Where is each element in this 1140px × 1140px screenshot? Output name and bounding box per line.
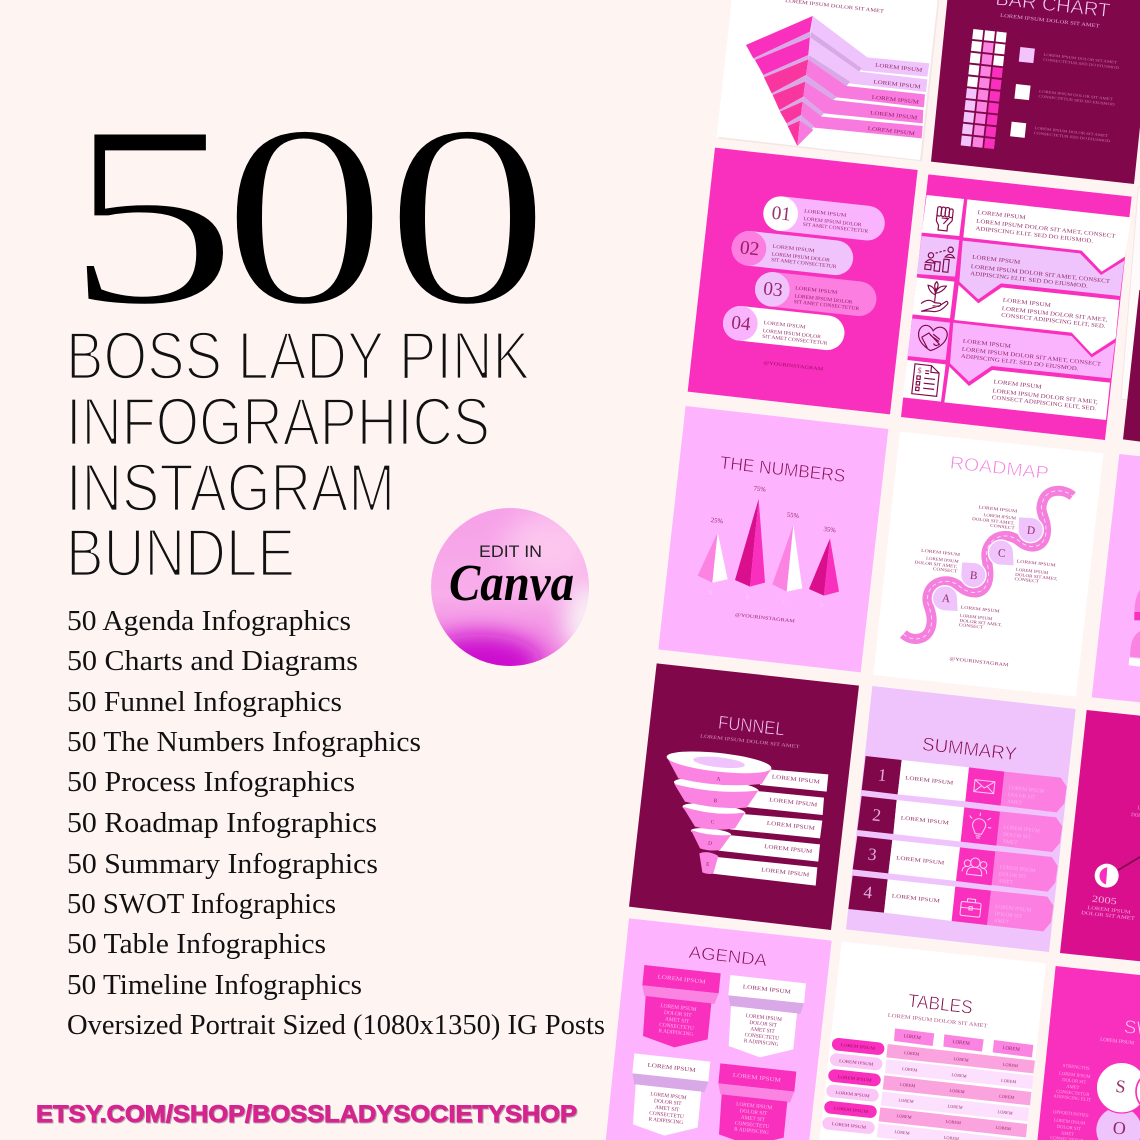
process text: LOREM IPSUM DOLOR SIT AMET,: [1001, 306, 1108, 324]
process rows: [944, 199, 1131, 420]
funnel letters and labels: LOREM IPSUM: [761, 867, 809, 879]
pill 01: LOREM IPSUM: [804, 209, 847, 219]
panel: process with icons: [901, 174, 1132, 440]
list of bundle contents: Oversized Portrait Sized (1080x1350) IG Posts: [67, 1009, 605, 1041]
summary row 1: AMET: [1007, 799, 1023, 807]
milestone markers: C: [997, 547, 1006, 560]
panel: the numbers: @YOURINSTAGRAM: [735, 613, 795, 624]
agenda card 1: CONSECTETU: [659, 1022, 694, 1032]
icon: plant in hand: [920, 280, 950, 314]
chart legend: LOREM IPSUM DOLOR SIT AMET: [1034, 126, 1109, 138]
pill 04: LOREM IPSUM DOLOR: [762, 329, 822, 340]
chart legend: LOREM IPSUM DOLOR SIT AMET: [1043, 53, 1118, 65]
panel: agenda cards: [603, 918, 832, 1140]
pyramid chart: D: [819, 603, 824, 609]
table rows: LOREM: [951, 1072, 967, 1079]
title number 500: 0: [222, 72, 387, 360]
list of bundle contents: 50 Process Infographics: [67, 766, 355, 798]
pill 03: LOREM IPSUM DOLOR: [794, 294, 853, 306]
table rows: LOREM: [1001, 1078, 1017, 1084]
summary row 3: 3: [867, 845, 878, 864]
chart legend: LOREM IPSUM DOLOR SIT AMET: [1039, 89, 1114, 101]
icon cells: [903, 195, 964, 402]
agenda card 1: [642, 965, 721, 1047]
panel: partial light pink post at right edge: [1092, 454, 1140, 703]
list of bundle contents: 50 Summary Infographics: [67, 848, 378, 880]
process text: ADIPISCING ELIT. SED DO EIUSMOD.: [960, 354, 1079, 373]
chart legend: CONSECTETUR SED DO EIUSMOD: [1043, 58, 1120, 70]
pyramid chart: B: [745, 595, 750, 601]
pyramid chart: C: [782, 599, 786, 605]
table column headers: LOREM: [903, 1034, 922, 1041]
table rows: LOREM: [904, 1050, 920, 1057]
table rows: LOREM: [902, 1066, 918, 1073]
icon: checklist document: $: [917, 366, 922, 376]
agenda card 1: DOLOR SIT: [664, 1010, 693, 1019]
roadmap labels: CONSECT: [933, 566, 958, 574]
agenda card 4: R ADIPISCING: [734, 1126, 769, 1136]
summary row 4: DOLOR SIT: [994, 911, 1023, 920]
shop url: ETSY.COM/SHOP/BOSSLADYSOCIETYSHOP: [36, 1101, 577, 1128]
pyramid chart: 55%: [786, 512, 800, 520]
process text: LOREM IPSUM: [972, 255, 1020, 266]
list of bundle contents: 50 SWOT Infographics: [67, 888, 336, 920]
shop url: ETSY.COM/SHOP/BOSSLADYSOCIETYSHOP: [37, 1102, 578, 1129]
agenda card 3: [632, 1053, 710, 1136]
table rows: LOREM: [946, 1119, 961, 1125]
agenda card 3: DOLOR SIT: [654, 1098, 683, 1107]
panel: dark post at right edge: [1123, 290, 1140, 442]
panel: bar chart: LOREM IPSUM DOLOR SIT AMET: [1000, 14, 1100, 29]
list of bundle contents: 50 Agenda Infographics: [67, 605, 351, 637]
badge: Edit in Canva: Canva: [449, 555, 574, 612]
table rows: LOREM: [1003, 1062, 1018, 1068]
list of bundle contents: 50 Funnel Infographics: [67, 686, 342, 718]
table column headers: [894, 1028, 1033, 1057]
roadmap labels: CONSECT: [1014, 576, 1040, 584]
swot circles: [1096, 1062, 1140, 1140]
agenda card 2: DOLOR SIT: [749, 1020, 778, 1029]
swot labels: OPPORTUNITIES: [1053, 1110, 1089, 1119]
process text: CONSECT ADIPISCING ELIT, SED.: [991, 395, 1097, 412]
agenda card 1: LOREM IPSUM: [657, 974, 706, 986]
swot labels: LOREM IPSUM: [1059, 1072, 1091, 1080]
summary row 2: LOREM IPSUM: [900, 815, 949, 827]
list of bundle contents: 50 Table Infographics: [67, 928, 326, 960]
process text: LOREM IPSUM DOLOR SIT AMET,: [992, 388, 1099, 406]
summary row 1: LOREM IPSUM: [1008, 785, 1045, 795]
funnel letters and labels: LOREM IPSUM: [766, 821, 815, 832]
pyramid right faces and label bars: [797, 16, 929, 146]
table row labels: LOREM IPSUM: [834, 1105, 868, 1114]
table rows: LOREM: [896, 1113, 912, 1120]
table row labels: LOREM IPSUM: [835, 1090, 870, 1098]
chart legend: [1010, 47, 1120, 143]
panel: bar chart: [931, 0, 1140, 184]
list of bundle contents: 50 The Numbers Infographics: [67, 726, 421, 758]
panel: tables: [817, 942, 1046, 1140]
pill 03: [753, 270, 878, 318]
winding road: [903, 491, 1073, 639]
chart legend: CONSECTETUR SED DO EIUSMOD: [1034, 131, 1111, 143]
agenda card 1: AMET SIT: [665, 1016, 690, 1025]
pyramid chart: 75%: [753, 485, 766, 494]
funnel cone layers: [666, 747, 772, 874]
panel: tables: LOREM IPSUM DOLOR SIT AMET: [887, 1013, 988, 1030]
roadmap labels: DOLOR SIT AMET,: [914, 559, 958, 570]
heading: Boss Lady Pink Infographics Instagram Bundle: BUNDLE: [66, 515, 295, 591]
table rows: LOREM: [996, 1125, 1011, 1131]
table column headers: LOREM: [1002, 1046, 1021, 1053]
summary row 3: LOREM IPSUM: [896, 855, 945, 867]
panel: funnel pyramid: [717, 0, 939, 161]
table rows: LOREM: [953, 1056, 969, 1063]
panel: agenda pills 01-04: [688, 148, 918, 414]
agenda card 3: CONSECTETU: [649, 1110, 684, 1120]
list of bundle contents: 50 Roadmap Infographics: [67, 807, 377, 839]
summary row 4: [848, 876, 1053, 931]
roadmap labels: LOREM IPSUM: [960, 613, 993, 621]
roadmap labels: CONSECT: [990, 523, 1015, 530]
process text: LOREM IPSUM DOLOR SIT AMET, CONSECT: [961, 347, 1102, 368]
roadmap labels: CONSECT: [959, 622, 984, 630]
panel: tables: TABLES: [907, 990, 974, 1018]
table rows: LOREM: [949, 1088, 965, 1094]
table row labels: LOREM IPSUM: [832, 1121, 866, 1130]
summary row 2: AMET: [1002, 839, 1019, 846]
list of bundle contents: 50 Timeline Infographics: [67, 969, 362, 1001]
agenda card 4: CONSECTETU: [735, 1120, 770, 1130]
agenda card 1: R ADIPISCING: [658, 1028, 694, 1038]
pill 02: SIT AMET CONSECTETUR: [771, 258, 837, 270]
swot labels: STRENGTHS: [1062, 1064, 1090, 1072]
panel: funnel: LOREM IPSUM DOLOR SIT AMET: [700, 734, 800, 750]
funnel letters and labels: LOREM IPSUM: [764, 844, 812, 855]
panel: timeline: LOREM IPSUM: [1087, 906, 1131, 916]
agenda card 2: [728, 975, 806, 1057]
pill 02: [730, 229, 855, 277]
pill 02: LOREM IPSUM DOLOR: [771, 252, 831, 264]
pill 02: 02: [739, 237, 760, 260]
table row labels: LOREM IPSUM: [839, 1058, 874, 1067]
table row labels: LOREM IPSUM: [837, 1074, 872, 1083]
process text: LOREM IPSUM DOLOR SIT AMET, CONSECT: [970, 264, 1111, 285]
table rows: LOREM: [947, 1103, 963, 1110]
agenda card 3: AMET SIT: [655, 1105, 680, 1113]
title number 500: [64, 72, 550, 360]
swot labels: ADIPISCING ELIT: [1053, 1094, 1091, 1103]
agenda card 4: LOREM IPSUM: [732, 1073, 781, 1084]
pill 04: SIT AMET CONSECTETUR: [762, 335, 828, 347]
swot labels: AMET: [1061, 1131, 1074, 1138]
timeline connector: [1118, 855, 1140, 870]
panel: summary: [846, 686, 1076, 952]
table row labels: LOREM IPSUM: [841, 1042, 875, 1051]
heading: Boss Lady Pink Infographics Instagram Bundle: INFOGRAPHICS: [66, 384, 490, 460]
pill 04: 04: [730, 312, 752, 335]
pyramid left faces: [746, 16, 813, 146]
funnel letters and labels: A: [716, 776, 721, 783]
panel: funnel: FUNNEL: [717, 711, 786, 740]
process text: LOREM IPSUM: [977, 210, 1026, 221]
summary row 1: DOLOR SIT: [1007, 792, 1036, 801]
swot circles: O: [1112, 1117, 1127, 1139]
panel: roadmap: ROADMAP: [949, 452, 1050, 483]
funnel letters and labels: [706, 774, 820, 879]
pyramid chart: A: [708, 590, 714, 597]
panel: the numbers: [658, 406, 888, 672]
process text: LOREM IPSUM: [993, 379, 1042, 391]
table row labels: [822, 1037, 885, 1135]
process text: [960, 210, 1116, 412]
milestone markers: [932, 517, 1043, 612]
funnel letters and labels: B: [713, 798, 718, 804]
pill 03: 03: [762, 278, 784, 301]
icon: heart and hand: [917, 325, 948, 352]
agenda card 3: LOREM IPSUM: [647, 1063, 696, 1074]
badge: Edit in Canva: EDIT IN: [479, 542, 542, 561]
agenda card 2: AMET SIT: [750, 1026, 776, 1035]
panel: swot: LOREM IPSUM: [1100, 1038, 1135, 1046]
process text: LOREM IPSUM: [962, 339, 1011, 350]
list of bundle contents: 50 Charts and Diagrams: [67, 645, 358, 677]
icon: checklist document: [912, 364, 940, 396]
panel: roadmap: @YOURINSTAGRAM: [949, 657, 1009, 668]
roadmap labels: [914, 504, 1058, 630]
agenda card 2: CONSECTETU: [744, 1032, 779, 1042]
panel: summary: SUMMARY: [921, 733, 1018, 764]
panel: the numbers: THE NUMBERS: [719, 452, 846, 486]
swot circles: S: [1115, 1076, 1127, 1097]
panel: roadmap: [873, 432, 1103, 697]
pyramid chart: 25%: [710, 517, 724, 525]
swot labels: CONSECTETUR: [1056, 1090, 1090, 1098]
table rows: LOREM: [900, 1082, 916, 1088]
pyramid right faces and label bars: LOREM IPSUM: [867, 126, 915, 137]
table rows: LOREM: [997, 1109, 1013, 1116]
panel: timeline: [1060, 710, 1140, 962]
roadmap labels: DOLOR SIT AMET,: [959, 618, 1002, 628]
process text: LOREM IPSUM: [1002, 298, 1051, 309]
table rows: LOREM: [898, 1097, 914, 1104]
roadmap labels: LOREM IPSUM: [978, 504, 1018, 514]
icon: growth chart: [925, 245, 956, 273]
pyramid right faces and label bars: LOREM IPSUM: [875, 63, 923, 74]
panel: agenda cards: AGENDA: [688, 942, 768, 970]
milestone markers: B: [969, 570, 978, 582]
pyramid chart: [698, 485, 839, 609]
roadmap labels: LOREM IPSUM: [1016, 567, 1049, 575]
summary row 1: LOREM IPSUM: [905, 775, 954, 787]
table rows: LOREM: [894, 1129, 910, 1136]
agenda card 2: LOREM IPSUM: [745, 1013, 782, 1023]
agenda card 4: AMET SIT: [740, 1115, 766, 1123]
list of bundle contents: [67, 605, 605, 1041]
summary row 2: [857, 796, 1062, 852]
summary row 4: LOREM IPSUM: [995, 904, 1032, 914]
agenda card 1: LOREM IPSUM: [660, 1003, 697, 1013]
swot labels: LOREM IPSUM: [1053, 1118, 1085, 1127]
milestone markers: D: [1026, 525, 1036, 537]
milestone markers: A: [941, 593, 952, 606]
summary row 4: AMET: [993, 918, 1010, 926]
process text: ADIPISCING ELIT. SED DO EIUSMOD.: [975, 226, 1094, 245]
roadmap labels: LOREM IPSUM: [926, 555, 959, 564]
pyramid right faces and label bars: LOREM IPSUM: [873, 79, 921, 90]
swot labels: [1050, 1064, 1091, 1140]
agenda card 2: R ADIPISCING: [743, 1038, 779, 1048]
process text: CONSECT ADIPISCING ELIT, SED.: [1001, 313, 1107, 330]
timeline marker: [1095, 864, 1119, 888]
chart legend: CONSECTETUR SED DO EIUSMOD: [1038, 94, 1115, 107]
heading: Boss Lady Pink Infographics Instagram Bundle: BOSS LADY PINK: [66, 318, 530, 394]
table rows: LOREM: [999, 1093, 1015, 1100]
agenda card 3: LOREM IPSUM: [650, 1091, 687, 1101]
roadmap labels: LOREM IPSUM: [1017, 558, 1056, 568]
pyramid right faces and label bars: LOREM IPSUM: [871, 95, 919, 106]
roadmap labels: DOLOR SIT AMET,: [972, 516, 1015, 527]
roadmap labels: LOREM IPSUM: [983, 512, 1016, 521]
funnel letters and labels: E: [706, 862, 710, 868]
summary row 2: LOREM IPSUM: [1003, 825, 1040, 835]
pill 03: LOREM IPSUM: [795, 286, 838, 296]
agenda card 2: LOREM IPSUM: [742, 984, 791, 996]
panel: right edge white post: [1121, 187, 1140, 402]
pill 02: LOREM IPSUM: [772, 245, 815, 254]
swot labels: AMET: [1066, 1085, 1080, 1091]
agenda card 4: LOREM IPSUM: [736, 1101, 773, 1111]
swot labels: DOLOR SIT: [1062, 1078, 1086, 1086]
summary row 2: DOLOR SIT: [1003, 832, 1032, 841]
table rows: [877, 1044, 1035, 1140]
icon: fist: [935, 206, 953, 231]
pill 01: [762, 195, 887, 242]
summary row 3: [853, 836, 1058, 892]
pill 01: LOREM IPSUM DOLOR: [803, 217, 862, 228]
pyramid right faces and label bars: LOREM IPSUM: [870, 110, 918, 121]
summary row 1: 1: [877, 765, 888, 785]
summary row 3: LOREM IPSUM: [999, 864, 1036, 874]
panel: timeline: 2005: [1091, 895, 1118, 907]
stacked square grid chart: [961, 29, 1007, 149]
heading: Boss Lady Pink Infographics Instagram Bundle: [66, 318, 530, 591]
pill 04: [721, 304, 846, 352]
panel: swot: [1035, 966, 1140, 1140]
funnel letters and labels: C: [710, 819, 715, 826]
funnel letters and labels: LOREM IPSUM: [771, 774, 820, 786]
pill 01: SIT AMET CONSECTETUR: [802, 223, 869, 235]
swot labels: DOLOR SIT: [1056, 1125, 1081, 1132]
panel: agenda pills 01-04: @YOURINSTAGRAM: [763, 361, 823, 372]
roadmap labels: LOREM IPSUM: [961, 604, 1000, 614]
agenda card 4: DOLOR SIT: [739, 1108, 768, 1117]
title number 500: 5: [64, 72, 239, 360]
badge: Edit in Canva: [431, 508, 589, 666]
roadmap labels: DOLOR SIT AMET,: [1015, 572, 1058, 582]
pill 04: LOREM IPSUM: [763, 321, 806, 331]
funnel letters and labels: LOREM IPSUM: [769, 797, 817, 809]
panel: funnel: [629, 663, 859, 930]
agenda card 3: R ADIPISCING: [648, 1116, 684, 1126]
summary row 3: AMET: [998, 878, 1014, 886]
process text: LOREM IPSUM DOLOR SIT AMET, CONSECT: [976, 219, 1116, 240]
panel: timeline: DOLOR SIT AMET: [1081, 911, 1135, 922]
summary row 1: [862, 756, 1067, 812]
table column headers: LOREM: [952, 1040, 971, 1047]
title number 500: 0: [385, 72, 550, 360]
process text: ADIPISCING ELIT. SED DO EIUSMOD.: [970, 271, 1089, 290]
agenda card 4: [718, 1063, 796, 1140]
roadmap labels: LOREM IPSUM: [921, 548, 960, 557]
summary row 4: LOREM IPSUM: [891, 893, 940, 905]
funnel label bars: [710, 768, 828, 886]
pill 01: 01: [771, 203, 792, 226]
summary row 2: 2: [871, 805, 882, 825]
pyramid chart: 35%: [823, 526, 836, 534]
funnel letters and labels: D: [708, 841, 712, 847]
pill 03: SIT AMET CONSECTETUR: [793, 300, 860, 312]
summary row 4: 4: [863, 883, 874, 902]
heading: Boss Lady Pink Infographics Instagram Bundle: INSTAGRAM: [66, 450, 395, 526]
summary row 3: DOLOR SIT: [998, 871, 1027, 880]
